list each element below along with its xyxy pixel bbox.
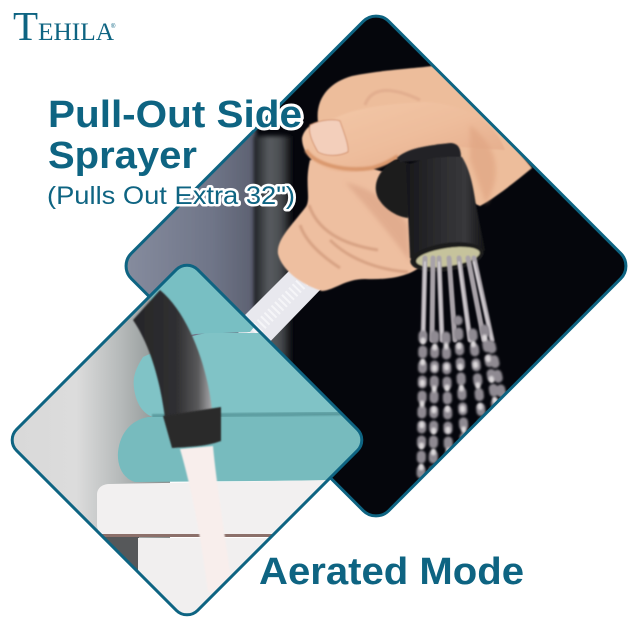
- blurred background wall: [128, 129, 259, 336]
- title: Sprayer: [48, 135, 197, 177]
- logo: ®: [111, 23, 116, 30]
- faucet neck: [133, 290, 212, 418]
- wrist shading: [470, 125, 496, 204]
- towel shading: [152, 413, 380, 416]
- thumbnail: [309, 120, 348, 155]
- lower fingers: [278, 160, 421, 291]
- wall: [14, 296, 170, 538]
- caption: aerated mode: Aerated Mode: [259, 551, 524, 593]
- lower counter block: [138, 538, 268, 613]
- panel: aerated mode photo diamond: [10, 264, 364, 616]
- knuckle crease: [365, 90, 420, 105]
- counter: [97, 480, 326, 534]
- sprayer head: [376, 143, 486, 276]
- title: Pull-Out Side: [48, 94, 302, 136]
- spray streams: [421, 258, 503, 480]
- thumb: [301, 126, 504, 170]
- title: [48, 94, 302, 177]
- blurred background pipe: [254, 136, 292, 396]
- hose: [238, 271, 320, 341]
- logo: [13, 3, 116, 49]
- aerator face: [409, 242, 484, 272]
- middle towel: [134, 333, 338, 416]
- big diamond border: [119, 9, 633, 523]
- subtitle: (Pulls Out Extra 32"): [47, 182, 295, 210]
- panel: side sprayer photo diamond: [124, 14, 628, 518]
- small diamond border: [6, 259, 368, 621]
- hand: [278, 66, 532, 291]
- water stream: [179, 445, 226, 538]
- dark gap: [102, 534, 272, 537]
- thumb underside shadow: [306, 150, 398, 169]
- lower towel: [118, 414, 380, 482]
- faucet collar: [163, 407, 221, 448]
- back of hand and wrist: [318, 66, 532, 206]
- logo: EHILA: [38, 19, 114, 46]
- logo: T: [13, 3, 38, 49]
- knuckle shading: [349, 184, 409, 257]
- top towel: [150, 266, 254, 335]
- finger crease shadow: [300, 205, 408, 272]
